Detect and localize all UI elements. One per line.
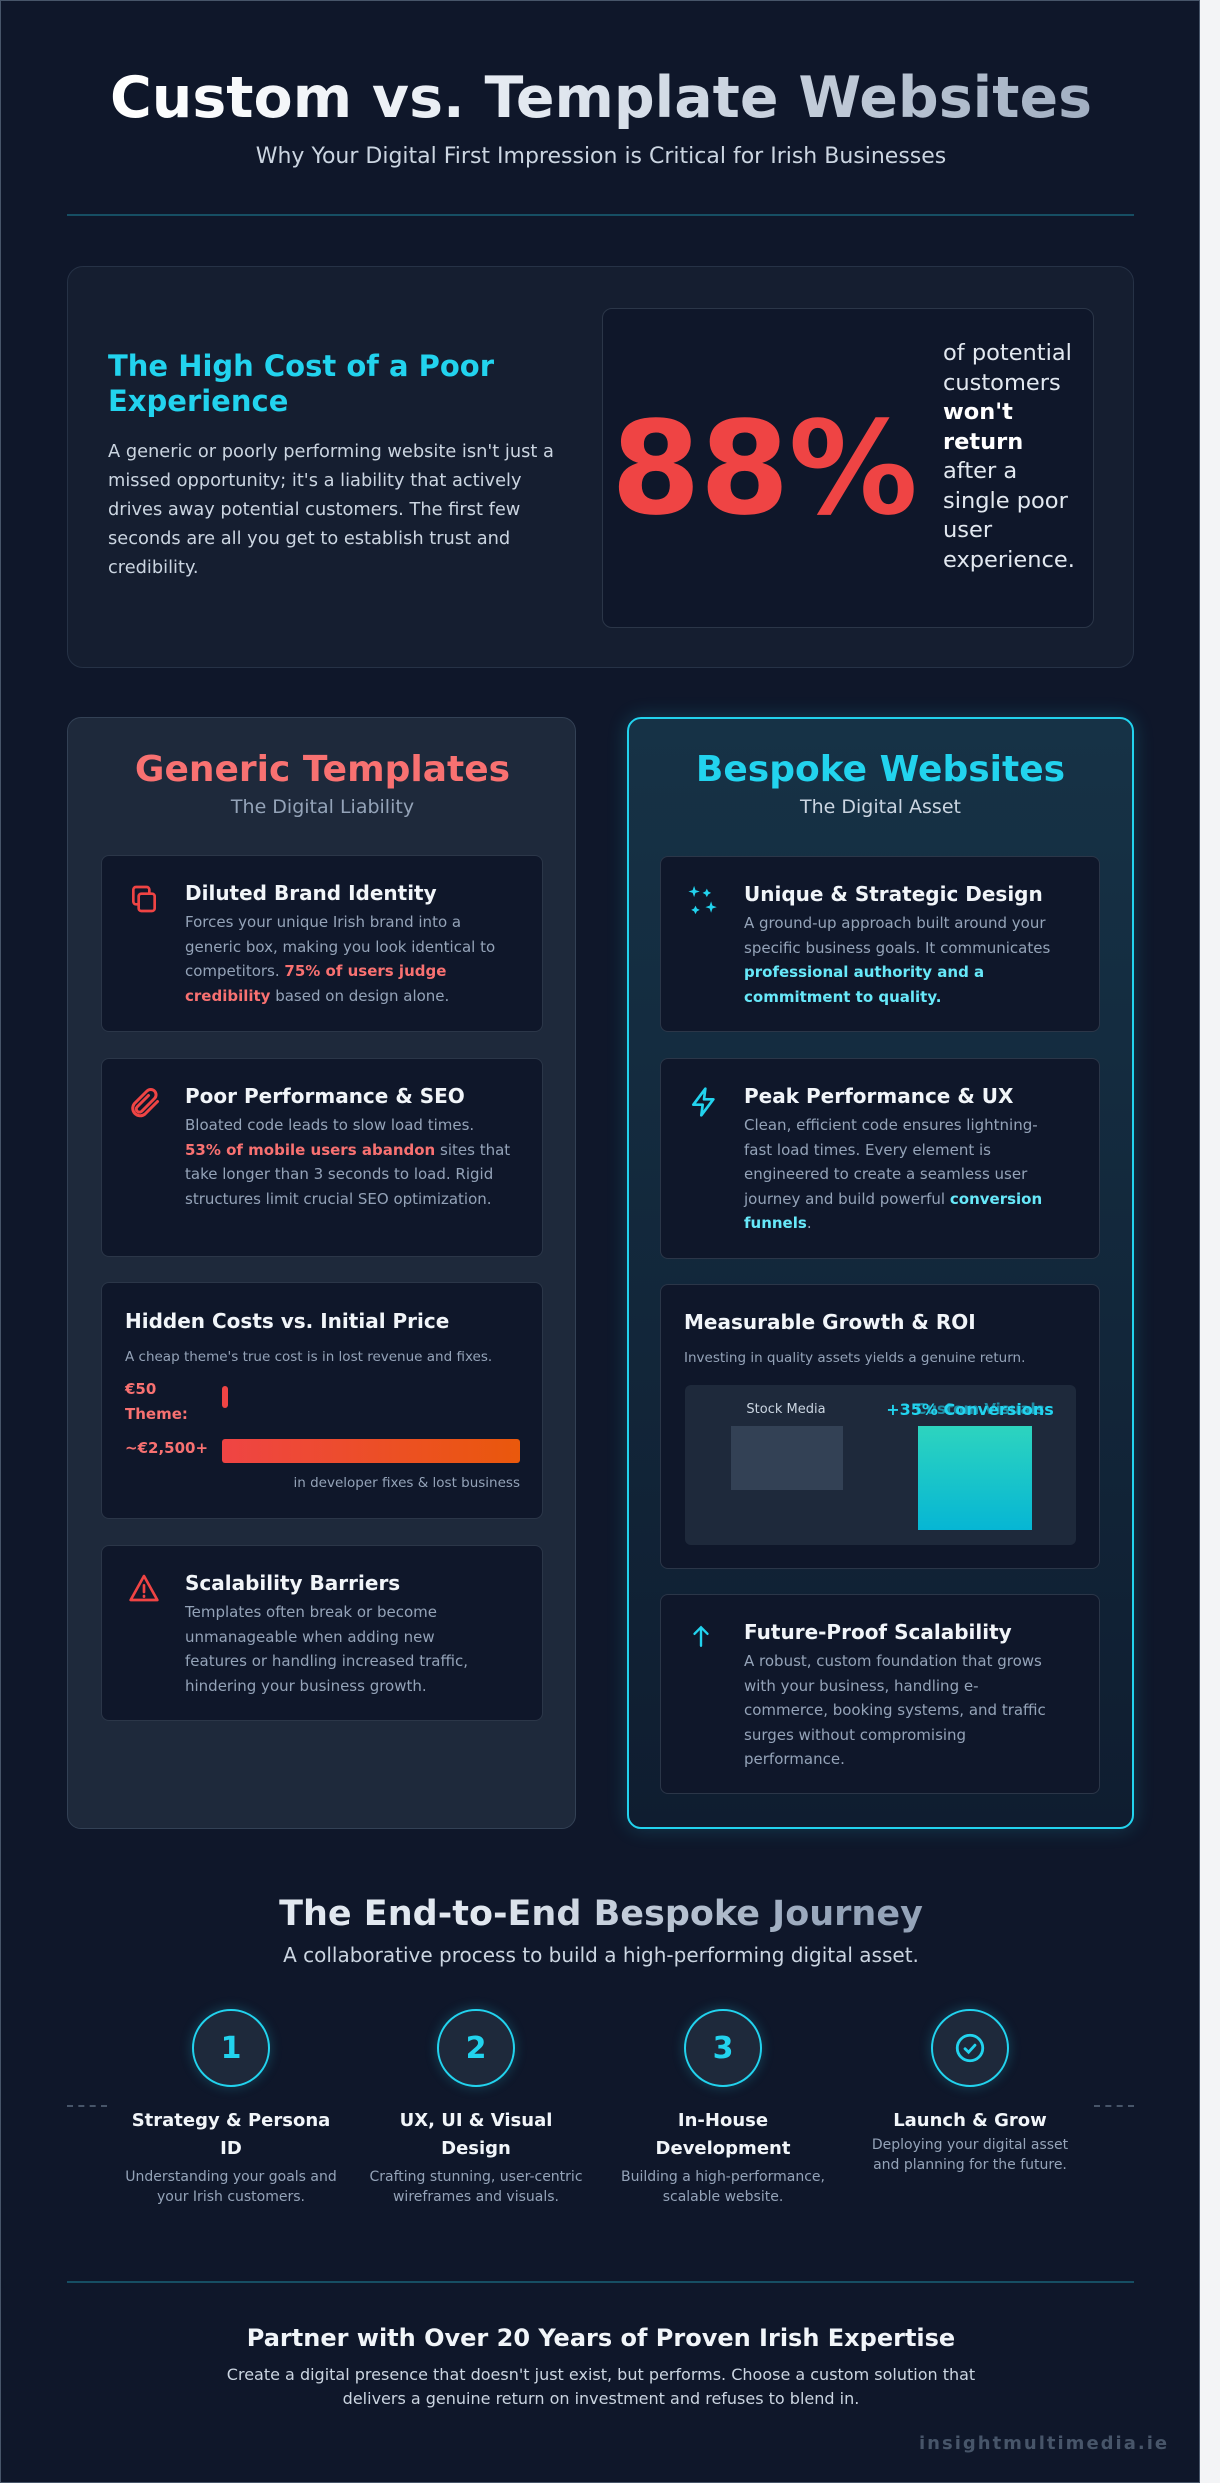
panel: hero cost: [67, 266, 1134, 668]
bar chart: costs: €50: [125, 1380, 156, 1398]
step 2: [369, 2004, 583, 2205]
title: [1, 59, 1201, 137]
step 3: 3: [713, 2030, 733, 2066]
step 2: 2: [466, 2030, 486, 2066]
step 3: [621, 2004, 825, 2205]
card: scalability barriers: Scalability Barriers: [185, 1571, 400, 1595]
sub bespoke: The Digital Asset: [800, 796, 961, 818]
hero paragraph: A generic or poorly performing website isn't just a missed opportunity; it's a liability that actively drives away potential customers. The first few seconds are all you get to establish trust and credibility.: [108, 441, 554, 578]
footer text: Create a digital presence that doesn't just exist, but performs. Choose a custom solution that delivers a genuine return on investment and refuses to blend in.: [227, 2365, 975, 2408]
footer heading: Partner with Over 20 Years of Proven Irish Expertise: [247, 2324, 955, 2352]
journey heading: The End-to-End Bespoke Journey: [279, 1894, 923, 1934]
bar chart: costs: Theme:: [125, 1405, 188, 1423]
journey subtitle: A collaborative process to build a high-performing digital asset.: [283, 1943, 919, 1967]
step 4: [872, 2004, 1068, 2173]
bar chart: costs: in developer fixes & lost business: [294, 1475, 520, 1491]
heading bespoke: Bespoke Websites: [696, 749, 1065, 790]
step 4: Deploying your digital asset and planning for the future.: [872, 2137, 1068, 2173]
card: poor performance: Bloated code leads to slow load times. 53% of mobile users abandon sites that take longer than 3 seconds to load. Rigid structures limit crucial SEO optimization.: [185, 1116, 510, 1208]
panel: generic templates: [67, 717, 576, 1829]
card: poor performance: [101, 1058, 543, 1257]
icon: copy: [132, 886, 156, 912]
card: future-proof: [660, 1594, 1100, 1794]
icon: sparkles: [688, 886, 717, 914]
step 1: [125, 2004, 337, 2205]
title: Custom vs. Template Websites: [110, 65, 1092, 131]
step 4: Launch & Grow: [893, 2110, 1047, 2131]
step 2: UX, UI & Visual Design: [400, 2110, 552, 2159]
subtitle: Why Your Digital First Impression is Critical for Irish Businesses: [256, 144, 946, 169]
step 3: Building a high-performance, scalable website.: [621, 2169, 825, 2205]
card: measurable growth: Measurable Growth & ROI: [684, 1310, 976, 1334]
icon: arrow up: [693, 1626, 709, 1647]
stat text: of potential customers won't return after a single poor user experience.: [943, 340, 1075, 572]
card: peak performance: Clean, efficient code ensures lightning-fast load times. Every element is engineered to create a seamless user journey and build powerful conversion funnels.: [744, 1116, 1042, 1232]
icon: lightning: [692, 1087, 715, 1117]
icon: paperclip: [131, 1088, 160, 1118]
step 2: Crafting stunning, user-centric wireframes and visuals.: [369, 2169, 583, 2205]
step 3: In-House Development: [656, 2110, 790, 2159]
hero heading: The High Cost of a Poor Experience: [108, 349, 494, 418]
bar chart: costs: ~€2,500+: [125, 1439, 208, 1457]
card: measurable growth: Investing in quality assets yields a genuine return.: [684, 1350, 1025, 1366]
step 1: Strategy & Persona ID: [132, 2110, 330, 2159]
card: scalability barriers: Templates often break or become unmanageable when adding new features or handling increased traffic, hindering your business growth.: [185, 1603, 468, 1694]
card: diluted brand: [101, 855, 543, 1032]
bar chart: growth: [685, 1385, 1076, 1545]
panel: bespoke websites: [627, 717, 1134, 1829]
card: unique design: A ground-up approach built around your specific business goals. It communicates professional authority and a commitment to quality.: [744, 914, 1050, 1006]
step 1: Understanding your goals and your Irish customers.: [125, 2169, 337, 2205]
icon: warning: [129, 1574, 159, 1602]
card: peak performance: [660, 1058, 1100, 1259]
bar chart: growth: Custom Visuals: [915, 1400, 1045, 1418]
step 1: 1: [221, 2030, 241, 2066]
stat box: [602, 308, 1094, 628]
bar chart: costs: [124, 1380, 520, 1491]
card: measurable growth: [660, 1284, 1100, 1569]
stat number: 88%: [611, 394, 917, 544]
heading generic: Generic Templates: [135, 749, 510, 790]
card: hidden costs: [101, 1282, 543, 1519]
bar chart: growth: Stock Media: [746, 1402, 826, 1417]
card: peak performance: Peak Performance & UX: [744, 1084, 1013, 1108]
card: poor performance: Poor Performance & SEO: [185, 1084, 465, 1108]
card: future-proof: A robust, custom foundation that grows with your business, handling e-​commerce, booking systems, and traffic surges without compromising performance.: [744, 1652, 1046, 1768]
card: diluted brand: Forces your unique Irish brand into a generic box, making you look identical to competitors. 75% of users judge credibility based on design alone.: [185, 913, 495, 1004]
card: unique design: Unique & Strategic Design: [744, 882, 1043, 906]
journey heading: [1, 1890, 1201, 1938]
bar chart: growth: +35% Conversions: [886, 1400, 1054, 1419]
card: future-proof: Future-Proof Scalability: [744, 1620, 1012, 1644]
sub generic: The Digital Liability: [231, 796, 414, 818]
card: hidden costs: A cheap theme's true cost is in lost revenue and fixes.: [125, 1349, 492, 1365]
card: diluted brand: Diluted Brand Identity: [185, 881, 437, 905]
card: scalability barriers: [101, 1545, 543, 1721]
card: hidden costs: Hidden Costs vs. Initial Price: [125, 1309, 449, 1333]
brand: insightmultimedia.ie: [919, 2433, 1169, 2454]
card: unique design: [660, 856, 1100, 1032]
